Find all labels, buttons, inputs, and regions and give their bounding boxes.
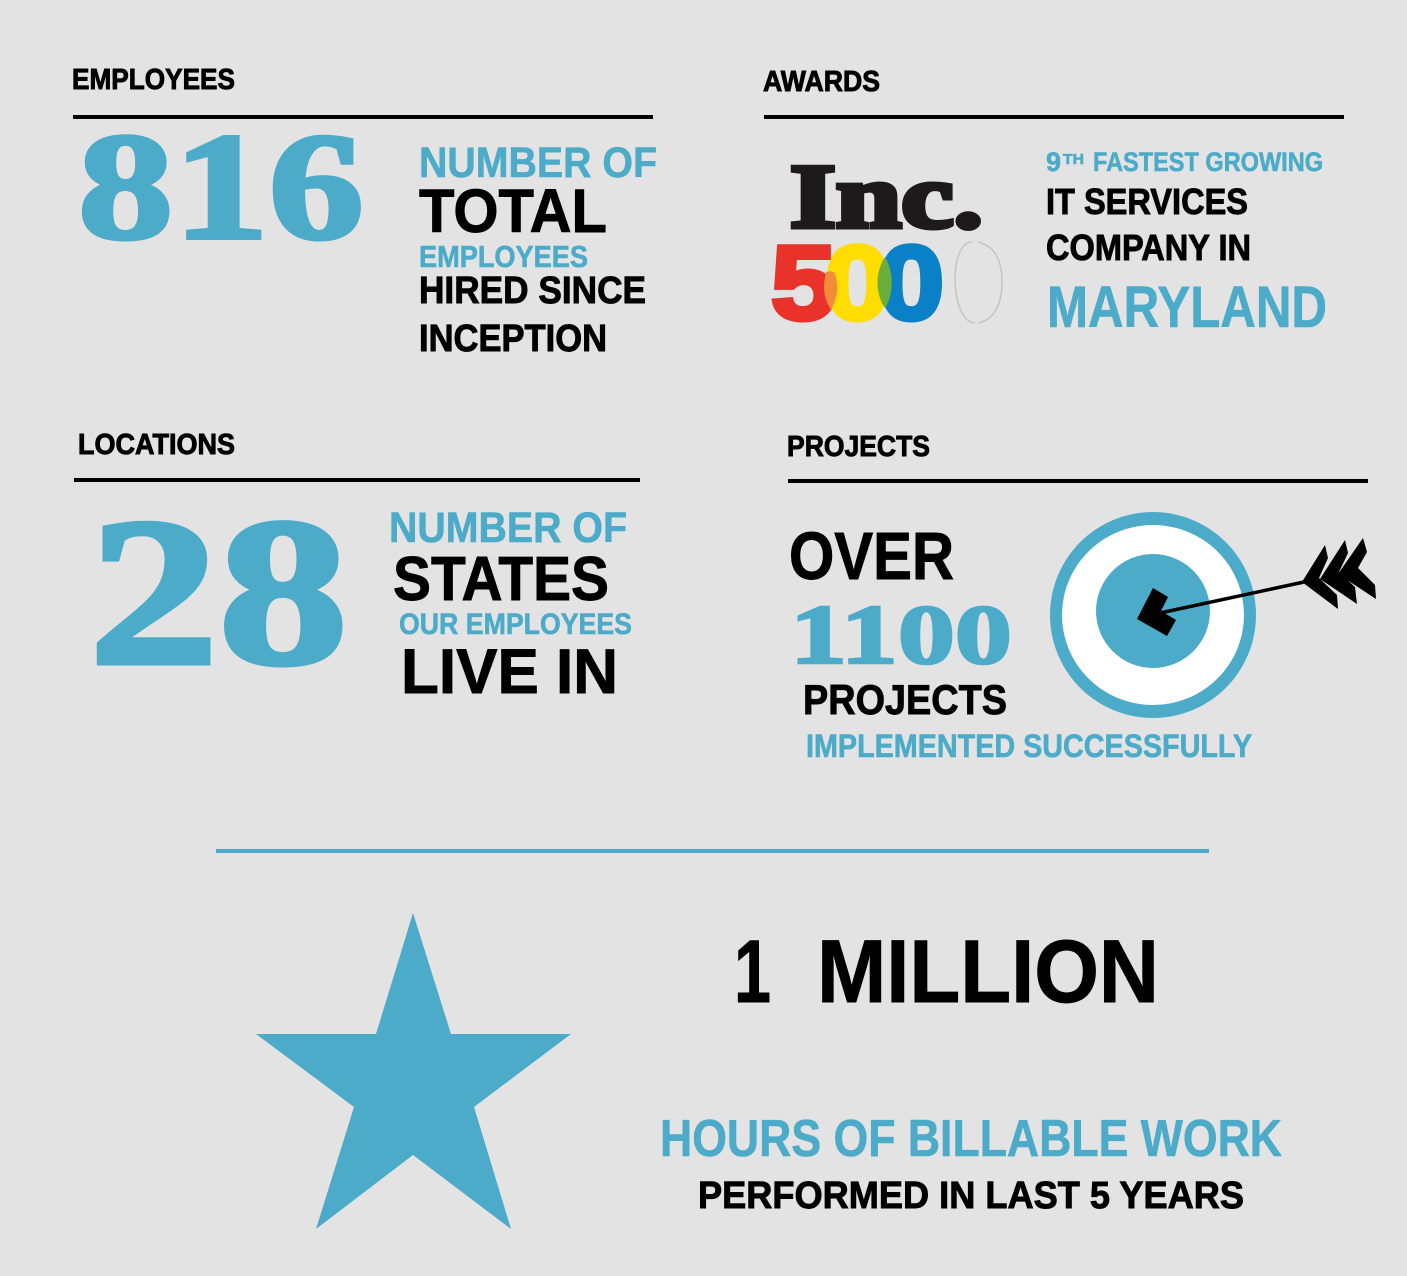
text block: employees description: HIRED SINCE (419, 270, 646, 312)
heading: locations: LOCATIONS (78, 429, 235, 461)
heading: employees: EMPLOYEES (72, 64, 235, 96)
text block: billable hours description: HOURS OF BILLABLE WORK (660, 1110, 1282, 1168)
text block: projects description: 1100 (790, 588, 1012, 682)
text block: billable hours description (660, 1110, 1282, 1217)
text block: employees description: EMPLOYEES (419, 239, 588, 274)
panel: awards (763, 66, 1344, 342)
number: 28: 28 (89, 475, 348, 709)
icon: star (256, 913, 571, 1229)
text block: awards description: TH (1063, 151, 1084, 168)
text block: awards description: MARYLAND (1047, 275, 1327, 340)
text block: awards description: IT SERVICES (1046, 181, 1248, 222)
heading: awards: AWARDS (763, 66, 880, 98)
text block: locations description: NUMBER OF (389, 504, 627, 552)
text block: employees description: NUMBER OF (419, 139, 657, 187)
icon: Inc. 5000 logo: 0 (879, 225, 944, 342)
text block: awards description: 9 (1046, 147, 1061, 177)
text block: 1 million: 1 (734, 921, 771, 1021)
number: 816: 816 (78, 103, 364, 272)
icon: Inc. 5000 logo: Inc. (790, 146, 983, 247)
icon: Inc. 5000 logo: 0 (825, 225, 890, 342)
text block: employees description (419, 139, 657, 360)
panel: billable hours (256, 913, 1282, 1229)
text block: locations description: STATES (393, 545, 609, 614)
panel: employees (72, 64, 657, 360)
text block: billable hours description: PERFORMED IN LAST 5 YEARS (698, 1175, 1244, 1217)
icon: Inc. 5000 logo (771, 146, 1002, 342)
icon: target with arrow (1050, 512, 1376, 718)
text block: employees description: TOTAL (419, 177, 607, 245)
text block: employees description: INCEPTION (419, 318, 607, 360)
text block: awards description: FASTEST GROWING (1093, 147, 1323, 177)
text block: locations description: LIVE IN (401, 637, 618, 707)
text block: awards description: COMPANY IN (1046, 227, 1251, 268)
text block: projects description: PROJECTS (803, 676, 1007, 723)
icon: Inc. 5000 logo: 5 (771, 225, 836, 342)
text block: projects description (789, 519, 1252, 764)
text block: locations description: OUR EMPLOYEES (399, 608, 632, 641)
heading: projects: PROJECTS (787, 431, 930, 463)
text block: 1 million: MILLION (817, 921, 1159, 1021)
panel: projects (787, 431, 1376, 764)
text block: locations description (389, 504, 632, 707)
text block: projects description: IMPLEMENTED SUCCESSFULLY (806, 728, 1252, 764)
text block: projects description: OVER (789, 519, 954, 594)
text block: awards description (1046, 147, 1327, 340)
panel: locations (74, 429, 640, 709)
